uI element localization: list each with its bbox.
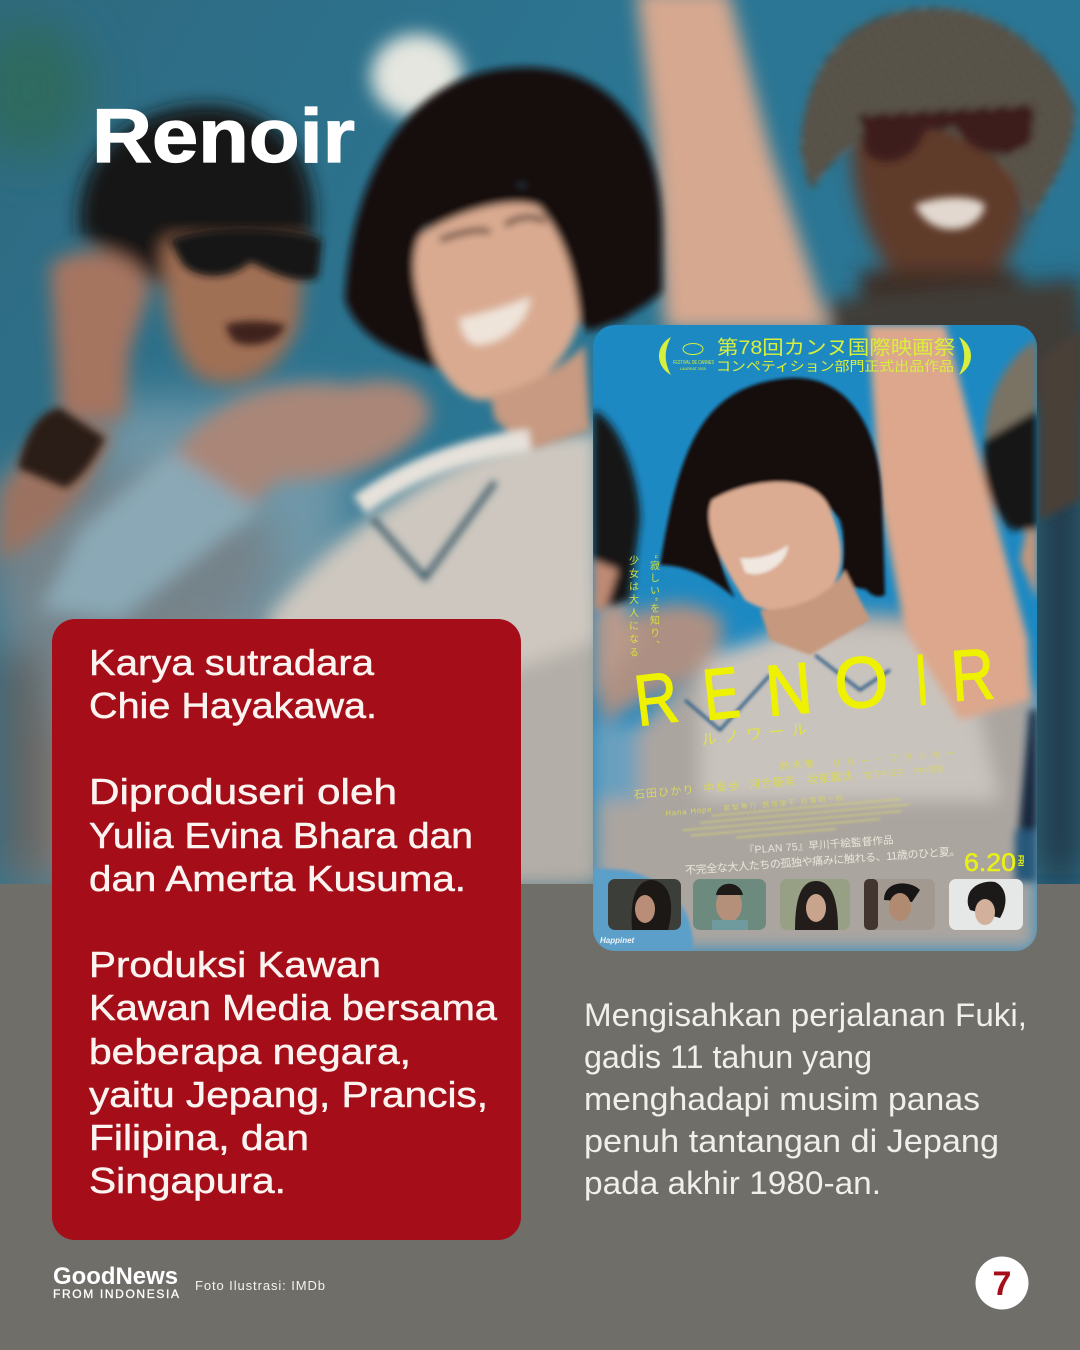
poster distributor logo: Happinet [600, 936, 635, 945]
poster cast and credits: Hana Hope [665, 805, 712, 818]
poster right figure [985, 340, 1037, 470]
poster cast and credits: 高梨琴乃 西垣康平 杉澤明一郎 [723, 793, 843, 813]
poster festival heading: FESTIVAL DE CANNES [673, 360, 715, 366]
poster raised arm [868, 325, 1030, 720]
page number badge [976, 1256, 1028, 1310]
right person face + neck [850, 101, 1032, 300]
right person hat [800, 8, 1075, 220]
poster Cannes logo [683, 344, 703, 354]
poster date: 6.20 [964, 849, 1016, 877]
poster date: FRI [1016, 855, 1024, 866]
credits text: director [89, 642, 377, 726]
poster title RENOIR: O [832, 641, 891, 725]
poster cast and credits: リリー・フランキー [831, 748, 956, 770]
poster left figure [593, 410, 640, 610]
poster title RENOIR: R [949, 634, 997, 717]
girl face [414, 192, 580, 400]
page number badge: 7 [993, 1265, 1011, 1303]
left man sunglasses [170, 229, 322, 280]
poster cast and credits [634, 750, 954, 816]
poster neck [760, 570, 870, 655]
poster shirt [593, 610, 1037, 951]
poster cast and credits: 中村恩恵 [913, 763, 944, 776]
poster vertical tagline: 少女は大人になる [626, 554, 638, 657]
poster vertical tagline: “寂しい”を知り、 [648, 555, 660, 650]
synopsis text: gadis 11 tahun yang [584, 1039, 872, 1075]
poster festival heading [659, 337, 971, 375]
arm right [636, 0, 830, 330]
poster title RENOIR: N [762, 648, 815, 732]
credits text: production: Filipina, dan [89, 1117, 309, 1158]
poster title RENOIR: R [630, 657, 683, 742]
poster festival heading: コンペティション部門正式出品作品 [716, 359, 954, 374]
credits text: producers: dan Amerta Kusuma. [89, 858, 466, 899]
credits text: director: Chie Hayakawa. [89, 685, 377, 726]
poster cast thumbnails [608, 879, 1023, 930]
poster cast and credits: 河合優実 [749, 774, 796, 791]
background photo: film still [0, 0, 1080, 890]
credits text: production: Produksi Kawan [89, 944, 381, 985]
panel: credits [52, 619, 521, 1240]
synopsis text: penuh tantangan di Jepang [584, 1123, 999, 1159]
credits text: production: Kawan Media bersama [89, 987, 498, 1028]
poster katakana title: ルノワール [701, 721, 808, 749]
poster laurels [659, 337, 671, 375]
poster cast and credits: 鈴木唯 [779, 758, 815, 773]
poster vertical tagline [626, 554, 660, 657]
synopsis text: menghadapi musim panas [584, 1081, 980, 1117]
poster girl hair [660, 378, 885, 598]
wristband [18, 408, 105, 488]
poster cast and credits: 中島歩 [703, 778, 740, 795]
poster title RENOIR: E [699, 653, 743, 736]
logo: GoodNews from Indonesia: GoodNews [53, 1263, 178, 1290]
shirt [260, 430, 600, 884]
title: Renoir [92, 94, 355, 179]
poster tagline: 不完全な大人たちの孤独や痛みに触れる、11歳のひと夏。 [685, 844, 961, 877]
poster tagline [686, 835, 954, 874]
synopsis text: pada akhir 1980-an. [584, 1165, 881, 1201]
poster date [965, 853, 1024, 872]
credits text: producers [89, 771, 473, 899]
logo: GoodNews from Indonesia: FROM INDONESIA [53, 1287, 179, 1301]
credits text: production [89, 944, 498, 1201]
photo credit: Foto Ilustrasi: IMDb [195, 1278, 325, 1293]
shirt collar stripe [372, 482, 495, 578]
credits text: producers: Diproduseri oleh [89, 771, 397, 812]
poster festival heading: LAUREAT 2025 [680, 366, 707, 371]
synopsis text [584, 997, 1027, 1201]
synopsis text: Mengisahkan perjalanan Fuki, [584, 997, 1027, 1033]
poster cast and credits: 宮下今日子 [864, 767, 904, 780]
poster blue patch [593, 868, 693, 951]
poster title RENOIR: I [913, 640, 931, 721]
poster festival heading: 第78回カンヌ国際映画祭 [717, 337, 956, 359]
neck [490, 345, 590, 450]
poster cast and credits: 坂東龍汰 [806, 768, 854, 786]
pale ball [371, 34, 463, 118]
poster title RENOIR [636, 649, 994, 726]
credits text: producers: Yulia Evina Bhara dan [89, 815, 473, 856]
poster cast and credits: 石田ひかり [633, 783, 694, 801]
girl hair back [345, 67, 662, 372]
panel: movie poster [593, 325, 1037, 951]
poster tagline: 『PLAN 75』早川千絵監督作品 [743, 833, 894, 857]
credits text: production: Singapura. [89, 1160, 286, 1201]
poster collar stripe [685, 675, 770, 730]
credits text: production: yaitu Jepang, Prancis, [89, 1074, 488, 1115]
poster girl face [709, 482, 841, 612]
credits text: production: beberapa negara, [89, 1031, 411, 1072]
credits text: director: Karya sutradara [89, 642, 375, 683]
left man [79, 106, 314, 300]
